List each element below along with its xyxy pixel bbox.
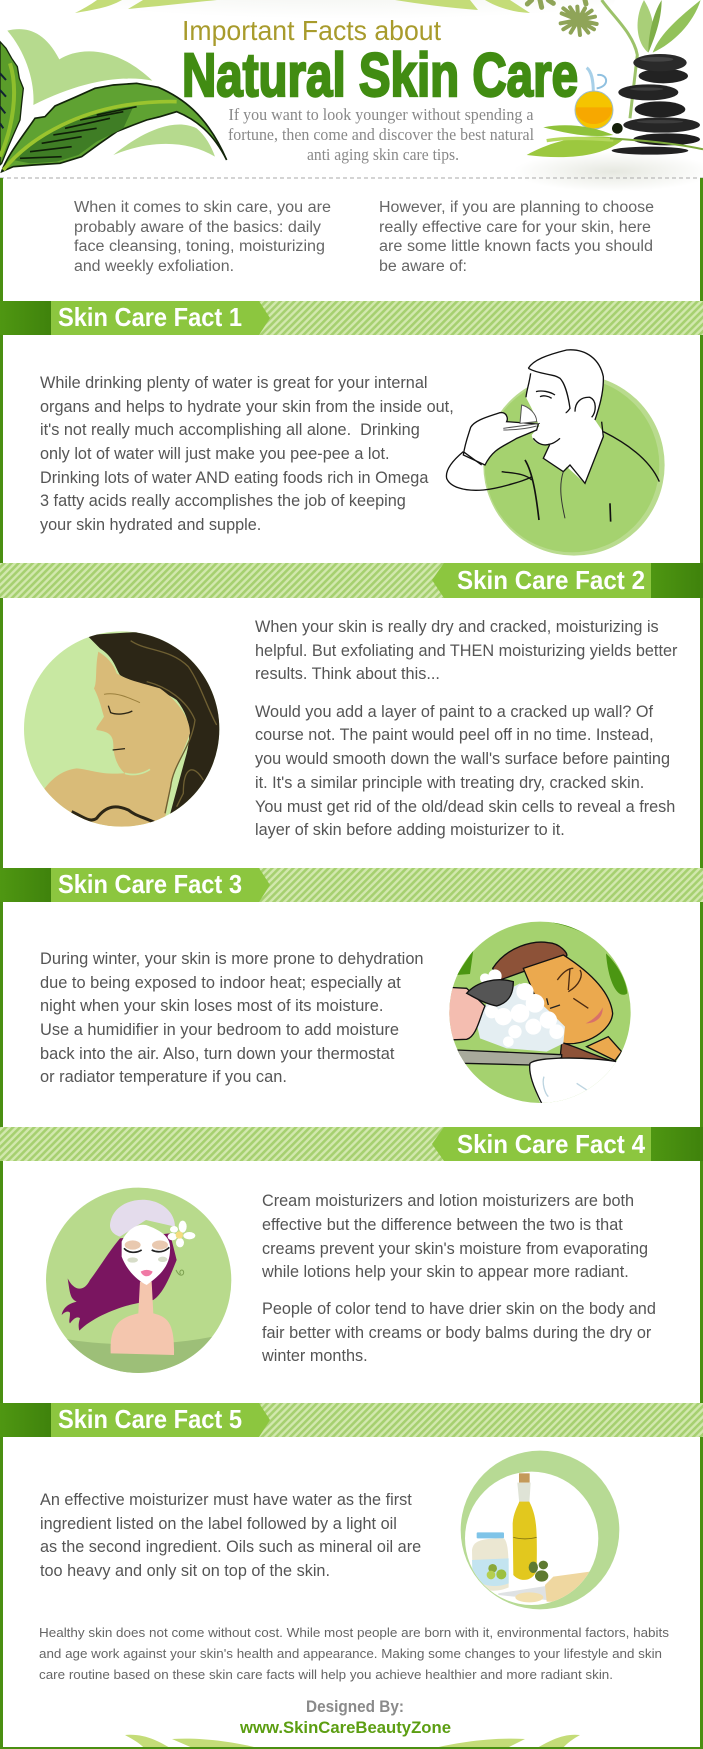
fact 2 text: it. It's a similar principle with treating dry, cracked skin. (255, 774, 644, 792)
fact 2 text: helpful. But exfoliating and THEN moisturizing yields better (255, 642, 678, 660)
illustration: face washing (448, 920, 640, 1107)
icon: spa stones, bamboo and oil flask (513, 0, 703, 192)
banner: Skin Care Fact 5: Skin Care Fact 5 (58, 1404, 242, 1434)
banner: Skin Care Fact 2: Skin Care Fact 2 (457, 565, 645, 595)
intro right text: really effective care for your skin, here (379, 219, 651, 236)
banner: Skin Care Fact 5 (0, 1403, 703, 1437)
banner: Skin Care Fact 4 (0, 1127, 703, 1161)
subtitle (228, 105, 534, 164)
fact 3 text: Use a humidifier in your bedroom to add moisture (40, 1021, 399, 1039)
fact 1 text: Drinking lots of water AND eating foods rich in Omega (40, 469, 429, 487)
intro left text: face cleansing, toning, moisturizing (74, 238, 325, 255)
fact 4 text: creams prevent your skin's moisture from evaporating (262, 1240, 648, 1258)
illustration: woman profile (24, 627, 227, 827)
closing paragraph: care routine based on these skin care facts will help you achieve healthier and more radiant skin. (39, 1667, 613, 1682)
fact 1 text: organs and helps to hydrate your skin from the inside out, (40, 398, 454, 416)
intro left text: When it comes to skin care, you are (74, 199, 331, 216)
fact 3 text: During winter, your skin is more prone to dehydration (40, 950, 424, 968)
banner: Skin Care Fact 4: Skin Care Fact 4 (457, 1129, 646, 1159)
fact 5 text: An effective moisturizer must have water as the first (40, 1491, 412, 1509)
illustration: man drinking water (446, 350, 665, 556)
subtitle: anti aging skin care tips. (307, 145, 459, 164)
fact 1 text (40, 374, 454, 534)
fact 4 text: while lotions help your skin to appear more radiant. (261, 1263, 629, 1281)
fact 2 text: When your skin is really dry and cracked, moisturizing is (255, 618, 659, 636)
title: Natural Skin Care: Natural Skin Care (182, 41, 578, 109)
fact 1 text: While drinking plenty of water is great for your internal (40, 374, 427, 392)
closing paragraph: Healthy skin does not come without cost. While most people are born with it, environmental factors, habits (39, 1625, 670, 1640)
fact 2 text: You must get rid of the old/dead skin cells to reveal a fresh (255, 798, 675, 816)
intro left text (74, 199, 331, 275)
fact 1 text: it's not really much accomplishing all alone. Drinking (40, 421, 420, 439)
fact 4 text: fair better with creams or body balms during the dry or (262, 1324, 652, 1342)
illustration: woman with face mask (46, 1188, 233, 1377)
icon: aloe leaf illustration (0, 29, 227, 172)
credit: website: www.SkinCareBeautyZone (239, 1718, 451, 1737)
fact 1 text: your skin hydrated and supple. (40, 516, 261, 534)
subtitle: If you want to look younger without spending a (228, 105, 534, 124)
fact 2 text: Would you add a layer of paint to a cracked up wall? Of (255, 703, 654, 721)
fact 3 text (40, 950, 424, 1086)
fact 2 text (255, 618, 678, 839)
header top leaves (75, 0, 615, 32)
closing paragraph (39, 1625, 670, 1682)
credit: designed by: Designed By: (306, 1697, 404, 1716)
fact 4 text: winter months. (261, 1347, 368, 1365)
banner: Skin Care Fact 2 (0, 563, 703, 598)
fact 4 text: Cream moisturizers and lotion moisturizers are both (262, 1192, 634, 1210)
fact 1 text: only lot of water will just make you pee-pee a lot. (40, 445, 390, 463)
title: Important Facts about: Important Facts about (182, 15, 441, 46)
fact 1 text: 3 fatty acids really accomplishes the job of keeping (40, 492, 406, 510)
dashed divider (0, 177, 703, 179)
intro right text: However, if you are planning to choose (379, 199, 654, 216)
intro left text: and weekly exfoliation. (74, 258, 234, 275)
fact 3 text: due to being exposed to indoor heat; especially at (40, 974, 401, 992)
fact 5 text: as the second ingredient. Oils such as mineral oil are (40, 1538, 421, 1556)
intro right text: be aware of: (379, 258, 467, 275)
fact 4 text: People of color tend to have drier skin on the body and (262, 1300, 656, 1318)
closing paragraph: and age work against your skin's health and appearance. Making some changes to your lifestyle and skin (39, 1646, 662, 1661)
illustration: oil bottle and cream (461, 1451, 619, 1609)
icon: decorative flowers (527, 0, 597, 35)
fact 3 text: back into the air. Also, turn down your thermostat (40, 1045, 395, 1063)
subtitle: fortune, then come and discover the best natural (228, 125, 534, 144)
intro right text (379, 199, 654, 275)
fact 2 text: course not. The paint would peel off in no time. Instead, (255, 726, 654, 744)
fact 2 text: results. Think about this... (255, 665, 440, 683)
intro left text: probably aware of the basics: daily (74, 219, 321, 236)
banner: Skin Care Fact 3 (0, 868, 703, 902)
fact 5 text: ingredient listed on the label followed by a light oil (40, 1515, 397, 1533)
intro right text: are some little known facts you should (379, 238, 653, 255)
fact 5 text (40, 1491, 421, 1580)
fact 4 text: effective but the difference between the two is that (262, 1216, 623, 1234)
fact 3 text: night when your skin loses most of its moisture. (40, 997, 383, 1015)
banner: Skin Care Fact 1 (0, 301, 703, 335)
fact 2 text: layer of skin before adding moisturizer to it. (255, 821, 565, 839)
banner: Skin Care Fact 1: Skin Care Fact 1 (58, 302, 242, 332)
fact 2 text: you would smooth down the wall's surface before painting (255, 750, 670, 768)
banner: Skin Care Fact 3: Skin Care Fact 3 (58, 869, 242, 899)
fact 5 text: too heavy and only sit on top of the skin. (40, 1562, 330, 1580)
fact 3 text: or radiator temperature if you can. (40, 1068, 287, 1086)
fact 4 text (261, 1192, 656, 1365)
footer leaves and rule (0, 1735, 703, 1749)
